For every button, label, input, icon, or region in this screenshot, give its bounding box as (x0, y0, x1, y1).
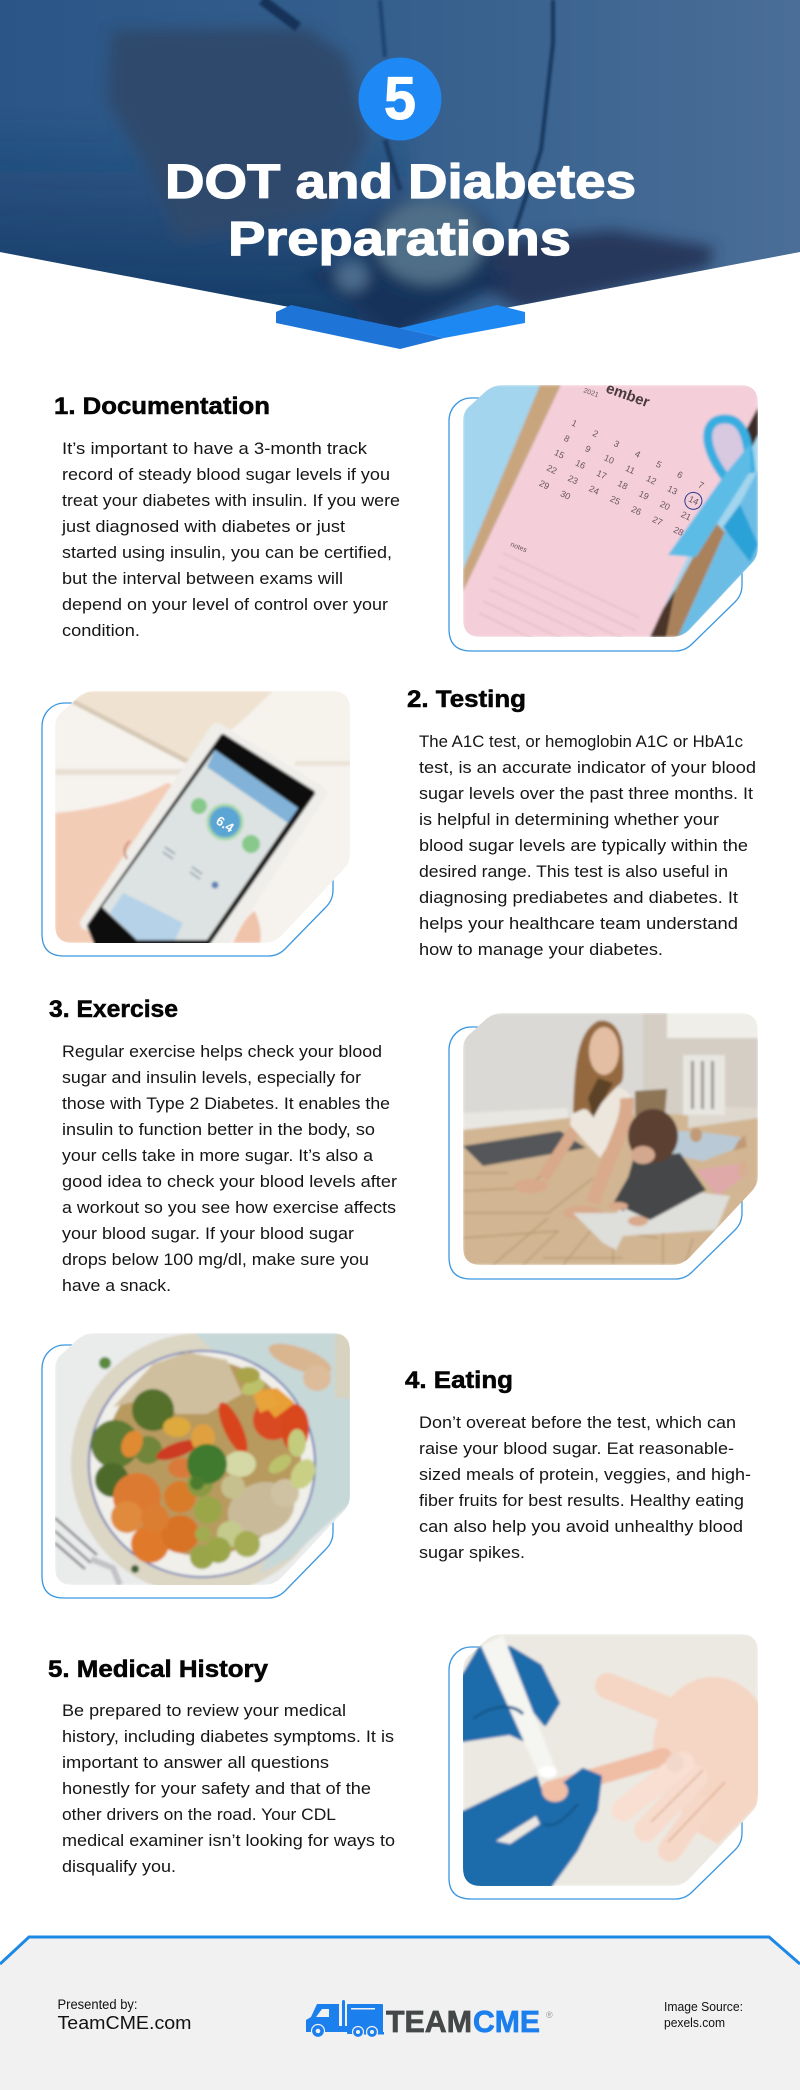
photo: calendar with blue ribbon: 6 (675, 469, 684, 480)
body text: important to answer all questions (62, 1753, 329, 1772)
panel: eating (42, 1333, 751, 1598)
body text: other drivers on the road. Your CDL (62, 1805, 336, 1824)
badge: number 5: 5 (384, 65, 416, 132)
body text: sugar spikes. (419, 1543, 525, 1562)
photo: calendar with blue ribbon: 1 (570, 418, 579, 429)
body text (61, 439, 400, 640)
panel: exercise (49, 996, 758, 1295)
body text: Be prepared to review your medical (62, 1701, 346, 1720)
body text: helps your healthcare team understand (419, 914, 738, 933)
body text: It’s important to have a 3-month track (62, 439, 368, 458)
photo: calendar with blue ribbon: 18 (616, 478, 629, 492)
heading: 2. Testing (407, 686, 526, 713)
body text: those with Type 2 Diabetes. It enables the (62, 1094, 390, 1113)
heading: 4. Eating (405, 1367, 513, 1394)
body text: record of steady blood sugar levels if you (62, 465, 390, 484)
heading: 3. Exercise (49, 996, 178, 1023)
wordmark (386, 2004, 553, 2039)
body text: blood sugar levels are typically within the (419, 836, 748, 855)
body text: condition. (62, 621, 140, 640)
photo: calendar with blue ribbon: 8 (562, 433, 571, 444)
photo: calendar with blue ribbon (449, 380, 758, 651)
body text: depend on your level of control over your (62, 595, 388, 614)
body text: but the interval between exams will (62, 569, 343, 588)
body text: sized meals of protein, veggies, and high- (419, 1465, 751, 1484)
body text: history, including diabetes symptoms. It is (62, 1727, 394, 1746)
body text: disqualify you. (62, 1857, 176, 1876)
body text: Regular exercise helps check your blood (62, 1042, 382, 1061)
footer: presented by (58, 1997, 192, 2033)
photo: calendar with blue ribbon: 24 (587, 483, 601, 497)
body text: is helpful in determining whether your (419, 810, 719, 829)
photo: calendar with blue ribbon: notes (509, 541, 528, 554)
body text: have a snack. (62, 1276, 171, 1295)
photo: calendar with blue ribbon: 10 (602, 453, 616, 466)
header photo banner (0, 0, 800, 350)
wordmark: TEAM (386, 2004, 472, 2039)
photo: finger prick blood test (449, 1634, 773, 1899)
photo: calendar with blue ribbon: 11 (624, 463, 637, 476)
body text: started using insulin, you can be certified, (62, 543, 392, 562)
photo: glucose app on phone: 6.4 (213, 813, 237, 836)
photo: calendar with blue ribbon: 15 (553, 447, 566, 461)
body text: your blood sugar. If your blood sugar (62, 1224, 354, 1243)
photo: calendar with blue ribbon: 3 (612, 438, 621, 450)
body text: good idea to check your blood levels after (62, 1172, 397, 1191)
body text: sugar and insulin levels, especially for (62, 1068, 361, 1087)
body text (62, 1701, 395, 1876)
photo: calendar with blue ribbon: 2 (591, 428, 600, 439)
body text: test, is an accurate indicator of your blood (419, 758, 756, 777)
body text: can also help you avoid unhealthy blood (419, 1517, 743, 1536)
title: DOT and Diabetes (165, 156, 636, 209)
photo: calendar with blue ribbon: 19 (637, 489, 651, 502)
body text: treat your diabetes with insulin. If you were (62, 491, 400, 510)
body text: drops below 100 mg/dl, make sure you (62, 1250, 369, 1269)
photo: calendar with blue ribbon: 25 (608, 494, 622, 507)
footer: image source (664, 1999, 743, 2030)
icon: truck (306, 2000, 384, 2038)
photo: vegetable and quinoa bowl (42, 1333, 351, 1598)
body text: diagnosing prediabetes and diabetes. It (419, 888, 738, 907)
body text (62, 1042, 397, 1295)
heading: 5. Medical History (48, 1656, 269, 1683)
panel: testing (42, 686, 756, 959)
photo: calendar with blue ribbon: ember (604, 380, 652, 411)
body text: Don’t overeat before the test, which can (419, 1413, 736, 1432)
body text: your cells take in more sugar. It’s also a (62, 1146, 374, 1165)
photo: calendar with blue ribbon: 13 (666, 483, 679, 497)
photo: calendar with blue ribbon: 4 (633, 449, 642, 460)
photo: calendar with blue ribbon: 7 (697, 480, 705, 491)
photo: calendar with blue ribbon: 29 (538, 478, 551, 491)
wordmark: CME (473, 2004, 540, 2039)
footer: image source: pexels.com (664, 2015, 725, 2030)
photo: mother and child yoga (449, 1013, 758, 1279)
title: Preparations (228, 213, 571, 266)
photo: calendar with blue ribbon: 9 (583, 443, 592, 455)
body text: how to manage your diabetes. (419, 940, 663, 959)
photo: calendar with blue ribbon: 21 (679, 509, 693, 523)
panel: documentation (54, 380, 758, 651)
photo: calendar with blue ribbon: 27 (651, 514, 664, 528)
heading: 1. Documentation (54, 393, 270, 420)
photo: calendar with blue ribbon: 14 (687, 494, 700, 507)
panel: medical history (48, 1634, 773, 1899)
title (165, 156, 636, 266)
photo: glucose app on phone (42, 691, 351, 956)
body text: honestly for your safety and that of the (62, 1779, 371, 1798)
photo: calendar with blue ribbon: 5 (654, 459, 663, 470)
body text: just diagnosed with diabetes or just (61, 517, 345, 536)
body text (419, 732, 756, 959)
photo: calendar with blue ribbon: 2021 (582, 387, 599, 399)
photo: calendar with blue ribbon: 28 (672, 525, 685, 538)
footer: image source: Image Source: (664, 1999, 743, 2014)
body text: fiber fruits for best results. Healthy eating (419, 1491, 744, 1510)
photo: calendar with blue ribbon: 22 (545, 463, 559, 476)
body text: a workout so you see how exercise affects (62, 1198, 396, 1217)
photo: calendar with blue ribbon: 26 (630, 504, 643, 517)
footer: presented by: TeamCME.com (58, 2012, 192, 2033)
wordmark: ® (546, 2010, 553, 2020)
photo: calendar with blue ribbon: 12 (645, 473, 658, 487)
photo: calendar with blue ribbon: 16 (574, 458, 587, 471)
body text (419, 1413, 751, 1562)
body text: insulin to function better in the body, so (62, 1120, 375, 1139)
footer: presented by: Presented by: (58, 1997, 138, 2012)
body text: sugar levels over the past three months. It (419, 784, 753, 803)
body text: desired range. This test is also useful in (419, 862, 728, 881)
photo: calendar with blue ribbon: 17 (595, 468, 608, 481)
badge: number 5 (358, 58, 442, 140)
photo: calendar with blue ribbon: 30 (559, 488, 572, 502)
body text: The A1C test, or hemoglobin A1C or HbA1c (419, 732, 743, 751)
header chevron accent (276, 305, 525, 349)
body text: raise your blood sugar. Eat reasonable- (419, 1439, 734, 1458)
footer top border (0, 1937, 800, 1964)
body text: medical examiner isn’t looking for ways to (62, 1831, 395, 1850)
logo: TeamCME truck and wordmark (306, 2000, 553, 2039)
footer band (0, 1937, 800, 2090)
photo: calendar with blue ribbon: 20 (658, 499, 672, 512)
photo: calendar with blue ribbon: 23 (566, 473, 580, 486)
